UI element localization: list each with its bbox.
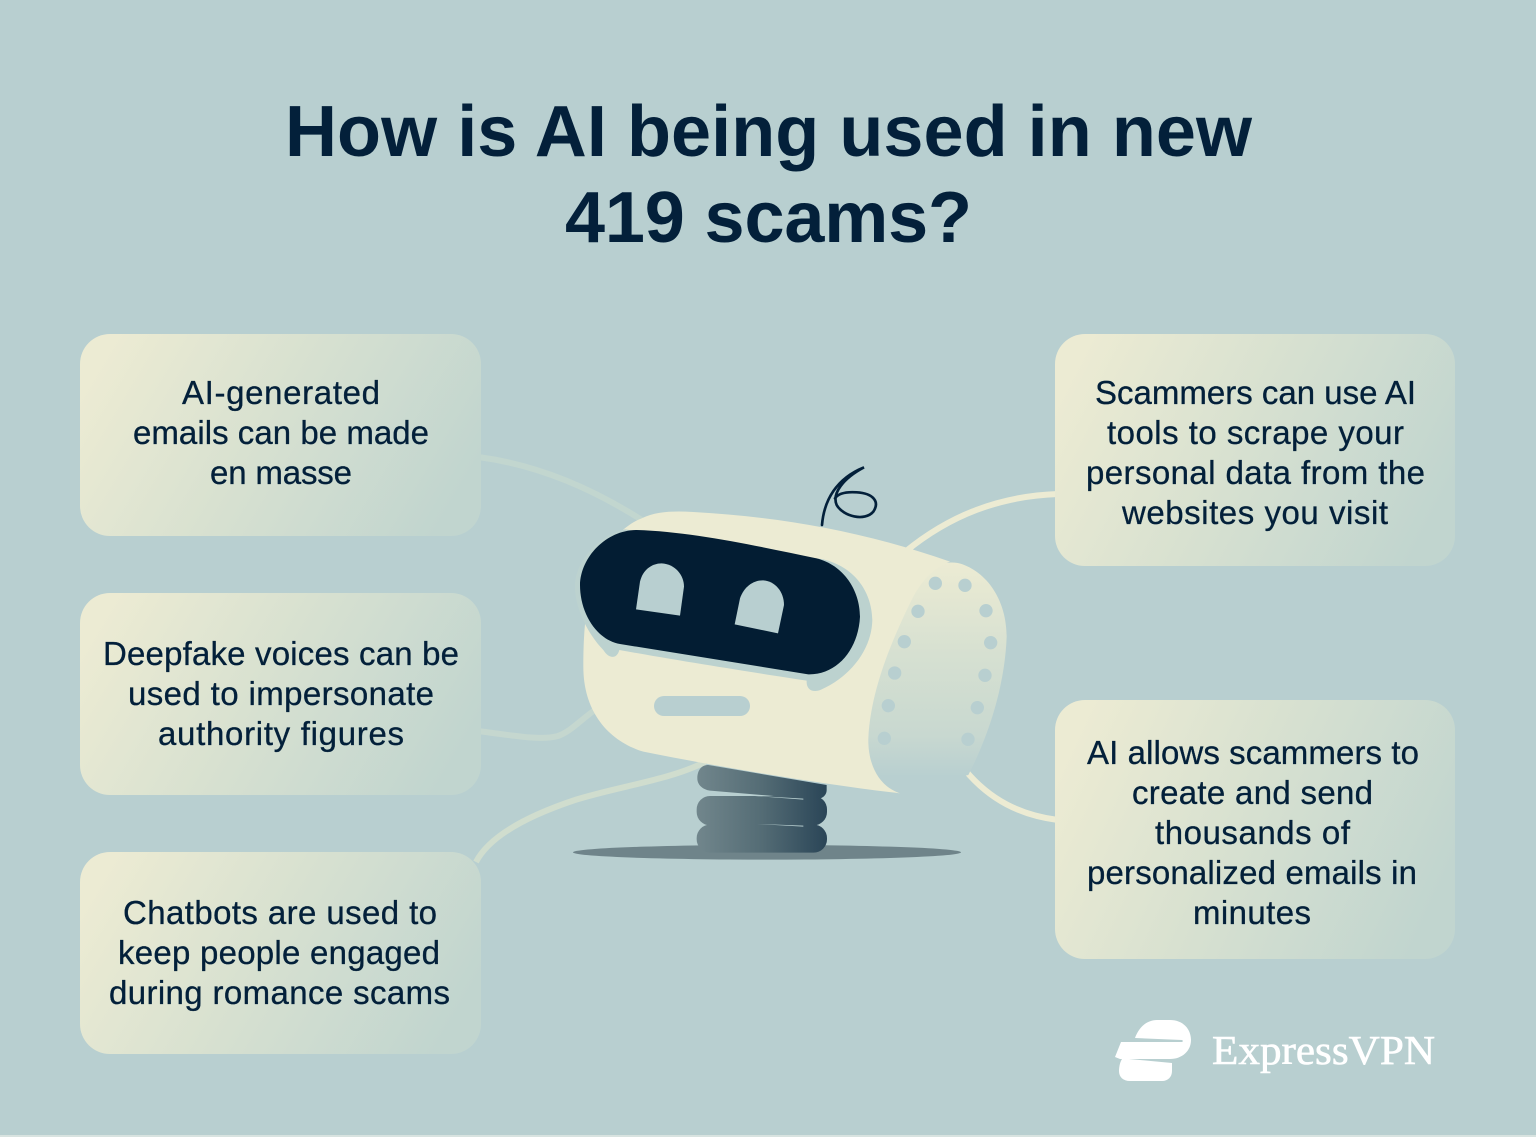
panel: scraping personal data: websites you visit: [1121, 494, 1388, 531]
robot visor shadow: [575, 529, 872, 691]
connector: personalized emails to robot: [965, 770, 1058, 820]
panel: personalized emails: AI allows scammers to: [1087, 734, 1419, 771]
panel: personalized emails: thousands of: [1155, 814, 1351, 851]
panel: deepfake voices: used to impersonate: [128, 675, 434, 712]
panel: scraping personal data: [1055, 334, 1455, 566]
panel: personalized emails: personalized emails in: [1087, 854, 1417, 891]
robot spring: [697, 765, 827, 853]
panel: AI-generated emails: emails can be made: [133, 414, 429, 451]
panel: scraping personal data: personal data from the: [1086, 454, 1425, 491]
panel: deepfake voices: [80, 593, 481, 795]
panel: personalized emails: create and send: [1132, 774, 1373, 811]
robot antenna: [822, 467, 876, 525]
robot ground shadow: [573, 845, 961, 860]
panel: personalized emails: [1055, 700, 1455, 959]
panel: AI-generated emails: en masse: [210, 454, 352, 491]
panel: AI-generated emails: [80, 334, 481, 536]
panel: AI-generated emails: AI-generated: [182, 374, 380, 411]
connector: chatbots to robot: [476, 762, 705, 862]
connector: deepfake to robot: [478, 708, 598, 738]
panel: chatbots: during romance scams: [109, 974, 450, 1011]
panel: scraping personal data: Scammers can use AI: [1095, 374, 1416, 411]
title: 419 scams?: [565, 178, 972, 258]
robot visor: [580, 530, 860, 674]
logo wordmark: ExpressVPN: [1212, 1027, 1435, 1073]
title: How is AI being used in new: [285, 92, 1253, 172]
logo icon: [1115, 1020, 1191, 1081]
panel: chatbots: [80, 852, 481, 1054]
panel: scraping personal data: tools to scrape your: [1107, 414, 1404, 451]
robot speaker dots: [878, 577, 997, 746]
connector: scrape to robot: [905, 494, 1058, 552]
robot head side panel: [868, 562, 1007, 793]
panel: deepfake voices: Deepfake voices can be: [103, 635, 459, 672]
icon: robot: [573, 467, 1007, 860]
panel: chatbots: Chatbots are used to: [123, 894, 437, 931]
robot head front: [583, 512, 950, 793]
title: [285, 92, 1253, 258]
panel: personalized emails: minutes: [1193, 894, 1311, 931]
robot left eye: [636, 563, 684, 616]
panel: chatbots: keep people engaged: [118, 934, 440, 971]
robot mouth: [654, 696, 750, 716]
robot right eye: [735, 580, 784, 633]
panel: deepfake voices: authority figures: [158, 715, 404, 752]
logo: ExpressVPN: [1115, 1020, 1435, 1081]
bottom edge line: [0, 1135, 1536, 1137]
connector: emails to robot: [478, 457, 645, 522]
